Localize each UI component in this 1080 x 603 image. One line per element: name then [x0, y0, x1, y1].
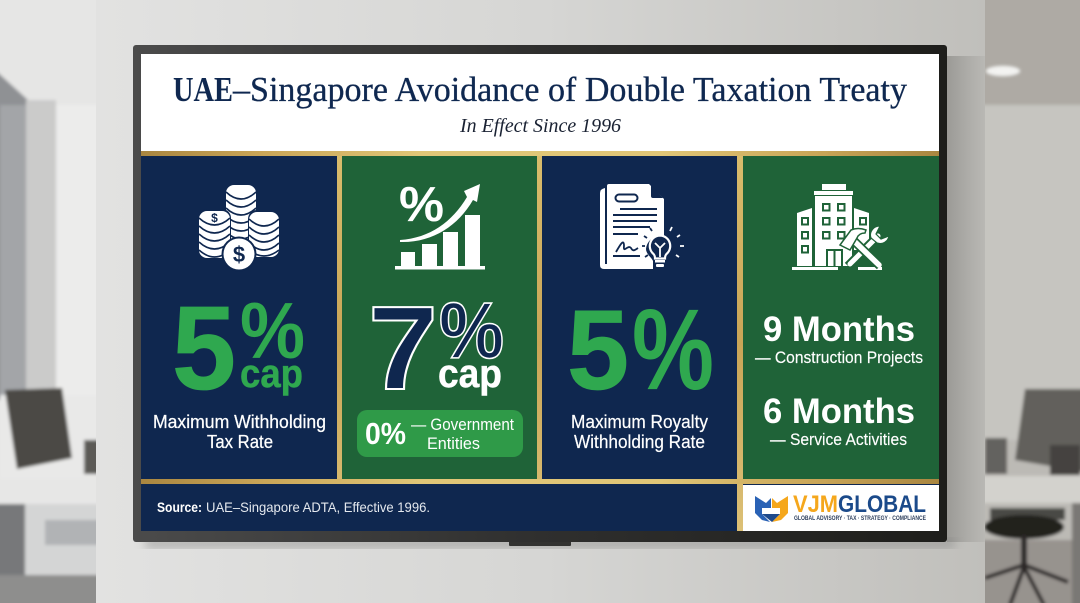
subtitle: In Effect Since 1996: [459, 115, 621, 137]
label: [571, 412, 708, 452]
pill: 0% government entities: Entities: [427, 434, 480, 453]
value: 5%: [567, 286, 714, 414]
logo background: [743, 485, 939, 531]
panel: government entities: [342, 156, 537, 479]
value: 7% cap: [368, 282, 504, 415]
stat: 6 months: 6 Months: [763, 392, 915, 431]
pill: 0% government entities: — Government: [411, 415, 514, 434]
value: 5% cap: cap: [240, 352, 303, 396]
monitor shadow on wall: [947, 56, 985, 542]
panel: permanent establishment: [743, 156, 939, 479]
label: Maximum Withholding: [153, 412, 326, 432]
icon: document with lightbulb: [600, 184, 684, 270]
stat: 6 months: [763, 392, 915, 449]
logo wordmark: VJM: [793, 491, 838, 518]
pill: 0% government entities: 0%: [365, 416, 406, 451]
stat: 9 months: — Construction Projects: [755, 349, 923, 367]
icon: percent with rising bars: [395, 178, 485, 270]
panel background: [141, 156, 337, 479]
icon: coins: $: [233, 242, 245, 267]
logo wordmark: GLOBAL: [838, 491, 926, 518]
title: –Singapore Avoidance of Double Taxation Treaty: [232, 70, 907, 109]
value: 7% cap: 7: [368, 282, 438, 415]
footer source: Source:: [157, 499, 202, 515]
monitor bottom shadow: [145, 538, 955, 548]
pill: 0% government entities: [357, 410, 523, 457]
gold rule below header: [141, 151, 939, 156]
logo: [743, 485, 939, 531]
footer source: UAE–Singapore ADTA, Effective 1996.: [206, 499, 430, 515]
title: UAE: [173, 70, 233, 109]
label: [153, 412, 326, 452]
icon: coins: [198, 185, 280, 272]
stat: 9 months: [755, 310, 923, 367]
icon: percent with rising bars: %: [399, 178, 444, 232]
monitor: [133, 45, 955, 548]
panel background: [743, 156, 939, 479]
panel: withholding tax: [141, 156, 337, 479]
label: Withholding Rate: [574, 432, 705, 452]
value: 5% cap: 5: [172, 282, 236, 415]
value: 7% cap: %: [439, 286, 504, 375]
logo mark: [755, 496, 788, 522]
stat: 9 months: 9 Months: [763, 310, 915, 349]
monitor bezel: [133, 45, 947, 542]
label: Tax Rate: [207, 432, 273, 452]
background: blurred office, left side: [0, 0, 100, 603]
icon: coins: $: [211, 211, 218, 225]
value: 5% cap: %: [240, 286, 305, 375]
header background: [141, 54, 939, 151]
value: 5%: %: [632, 286, 714, 414]
panel: royalty: [542, 156, 737, 479]
monitor stand tab: [509, 540, 571, 546]
logo wordmark: [793, 491, 926, 518]
header: [141, 54, 939, 151]
label: Maximum Royalty: [571, 412, 708, 432]
value: 7% cap: cap: [438, 352, 502, 396]
panel background: [542, 156, 737, 479]
panel background: [342, 156, 537, 479]
value: 5% cap: [172, 282, 305, 415]
stat: 6 months: — Service Activities: [770, 431, 907, 449]
logo tagline: GLOBAL ADVISORY · TAX · STRATEGY · COMPLIANCE: [794, 515, 926, 522]
background: blurred office, right side: [980, 0, 1080, 603]
gold dividers: [141, 156, 939, 531]
icon: building with tools: [792, 184, 889, 270]
screen base: [141, 54, 939, 531]
value: 5%: 5: [567, 287, 629, 413]
